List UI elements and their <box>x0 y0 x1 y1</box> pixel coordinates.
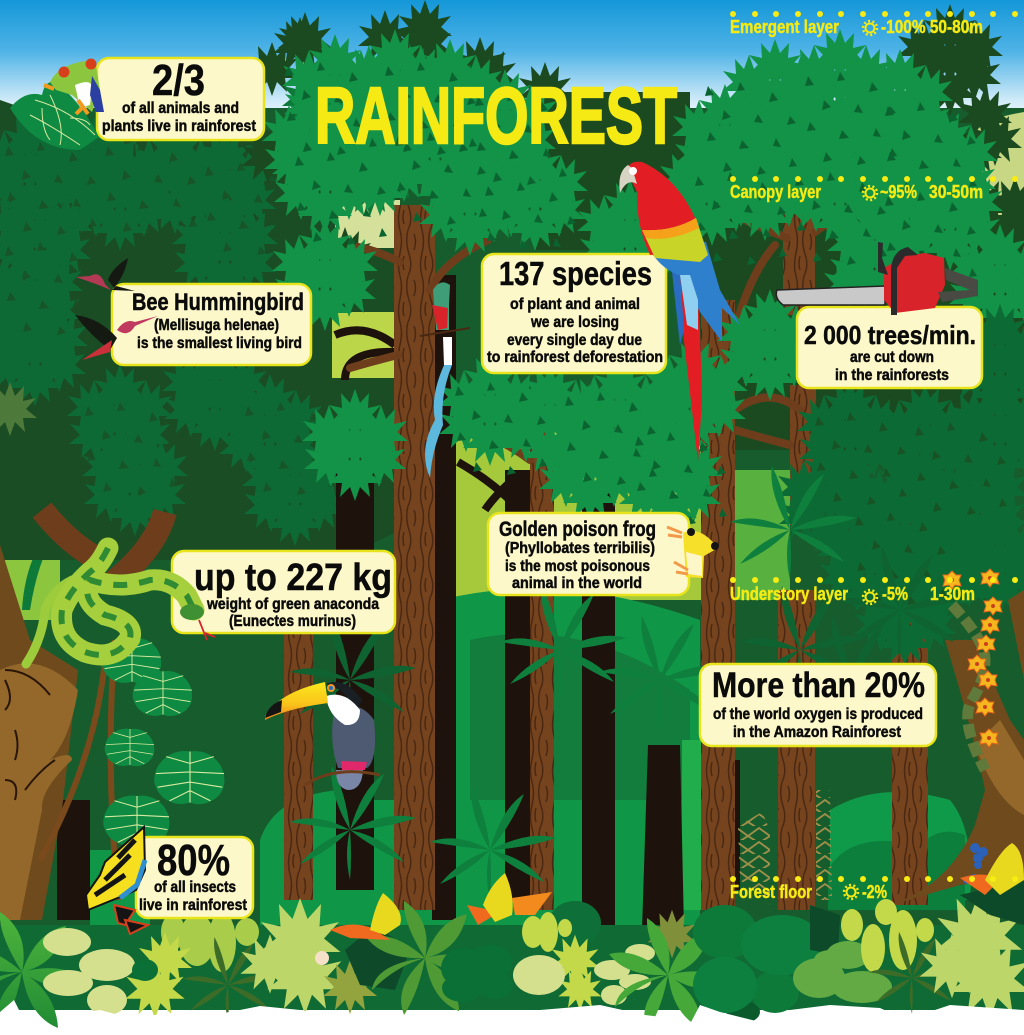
torn white bottom edge <box>0 1000 1024 1035</box>
panel: 137 species <box>482 254 666 373</box>
icon: sun <box>863 21 877 35</box>
layer: forest floor <box>730 876 1018 902</box>
label: Canopy layer: Canopy layer <box>730 182 821 202</box>
text: weight of green anaconda: weight of green anaconda <box>206 596 379 613</box>
icon: chainsaw <box>776 242 978 315</box>
palm fronds in the understory <box>290 466 966 900</box>
heading: 137 species: 137 species <box>499 255 652 292</box>
panel: 80 percent of insects <box>136 836 253 918</box>
icon: sun <box>863 590 877 604</box>
panel: 2 000 trees per minute <box>797 307 982 388</box>
forest floor plants <box>0 843 1024 1032</box>
text: frog species and fact: animal in the world <box>512 575 642 592</box>
icon: red-eyed tree frog on leaf <box>10 58 104 150</box>
text: of all insects live in rainforest: of all insects <box>154 879 236 896</box>
icon: toucan <box>265 682 380 790</box>
lime fern group right <box>920 892 1024 1019</box>
stat: 80%: 80% <box>157 836 230 885</box>
label: Forest floor: Forest floor <box>730 882 812 902</box>
title: RAINFOREST <box>315 71 677 160</box>
panel: bee hummingbird <box>112 284 311 365</box>
dark left canopy mass <box>0 100 400 560</box>
bright emergent canopy foliage: centre tree <box>262 29 588 501</box>
bright mid-height foliage: centre <box>437 179 748 536</box>
blue flowers <box>963 843 988 884</box>
text: of all insects live in rainforest <box>139 879 248 914</box>
text: species and fact: is the smallest living bird <box>137 335 302 352</box>
hanging vines and monstera leaves <box>40 638 224 900</box>
value: ~95% 30-50m <box>880 182 983 202</box>
heading: up to 227 kg: up to 227 kg <box>194 557 392 599</box>
panel: golden poison frog <box>488 513 689 595</box>
panel: 2/3 of all animals <box>97 56 264 140</box>
text: world oxygen fact: in the Amazon Rainforest <box>733 724 902 741</box>
panel: green anaconda <box>172 551 395 633</box>
small olive clump <box>0 382 37 436</box>
icon: swallowtail butterfly and red admiral <box>86 827 148 934</box>
dark canopy behind the tall trees <box>241 0 1024 450</box>
heading: Bee Hummingbird: Bee Hummingbird <box>132 289 304 316</box>
label: Emergent layer: Emergent layer <box>730 17 839 37</box>
label: Understory layer: Understory layer <box>730 584 848 604</box>
text: of all animals and plants live in rainforest: plants live in rainforest <box>102 118 257 135</box>
text: are cut down in the rainforests: in the rainforests <box>835 367 949 384</box>
layer: emergent <box>730 11 1018 37</box>
icon: sun <box>863 186 877 200</box>
text: deforestation fact: we are losing <box>530 314 619 331</box>
icon: scarlet macaw <box>619 162 740 462</box>
text: world oxygen fact <box>713 706 923 741</box>
value: -5% 1-30m <box>882 584 975 604</box>
value: ~95% 30-50m: ~95% <box>880 182 917 202</box>
small orange-white flower <box>315 951 329 965</box>
right strangler tree <box>890 590 1024 905</box>
stat: 2/3: 2/3 <box>152 56 205 105</box>
text: frog species and fact: is the most poisonous <box>505 558 650 575</box>
pale sky-lit gaps beside the central trunk <box>332 200 400 378</box>
text: frog species and fact: (Phyllobates terribilis) <box>505 540 655 557</box>
text: deforestation fact: every single day due <box>507 332 642 349</box>
icon: golden poison frog <box>667 527 719 578</box>
text: deforestation fact <box>487 296 663 366</box>
text: deforestation fact: of plant and animal <box>510 296 640 313</box>
text: species and fact <box>137 317 302 352</box>
orange and yellow leaves <box>330 873 552 940</box>
lime leaves group left <box>161 912 259 972</box>
value: -5% 1-30m: -5% <box>882 584 908 604</box>
lower right canopy foliage <box>777 304 1024 666</box>
text: of all animals and plants live in rainforest <box>102 100 257 135</box>
panel: more than 20 percent oxygen <box>700 664 936 746</box>
heading: More than 20%: More than 20% <box>712 666 925 705</box>
icon: two hummingbirds <box>75 258 158 360</box>
text: are cut down in the rainforests <box>835 349 949 384</box>
text: species and fact: (Mellisuga helenae) <box>154 317 279 334</box>
icon: green anaconda <box>26 548 215 664</box>
value: ~95% 30-50m: 30-50m <box>929 182 983 202</box>
left large palm <box>0 912 82 1032</box>
pale round leaves <box>43 928 135 1015</box>
layer: understory <box>730 577 1018 604</box>
text: world oxygen fact: of the world oxygen is produced <box>713 706 923 723</box>
value: -100% 50-80m: -100% 50-80m <box>881 17 983 37</box>
value: -5% 1-30m: 1-30m <box>930 584 975 604</box>
icon: quetzal <box>420 282 470 478</box>
sky background <box>0 0 1024 128</box>
heading: Golden poison frog: Golden poison frog <box>499 518 656 541</box>
layer: canopy <box>730 176 1018 202</box>
dark background trunks and limbs <box>57 275 740 940</box>
brown rainforest trunks <box>284 195 928 910</box>
text: are cut down in the rainforests: are cut down <box>850 349 934 366</box>
icon: sun <box>844 885 858 899</box>
hanging yellow-flower vine <box>943 569 1002 770</box>
text: frog species and fact <box>505 540 655 592</box>
text: deforestation fact: to rainforest deforestation <box>487 349 663 366</box>
text: of all insects live in rainforest: live in rainforest <box>139 897 248 914</box>
large dark round leaves <box>693 905 799 1013</box>
text: weight of green anaconda: (Eunectes murinus) <box>229 613 356 630</box>
value: -2%: -2% <box>862 882 887 902</box>
text: of all animals and plants live in rainforest: of all animals and <box>122 100 239 117</box>
heading: 2 000 trees/min.: 2 000 trees/min. <box>804 320 976 350</box>
lattice fern trunks <box>738 790 832 905</box>
text: weight of green anaconda <box>206 596 379 630</box>
bright emergent canopy foliage: right tree <box>659 29 1024 401</box>
left strangler tree <box>0 510 165 920</box>
